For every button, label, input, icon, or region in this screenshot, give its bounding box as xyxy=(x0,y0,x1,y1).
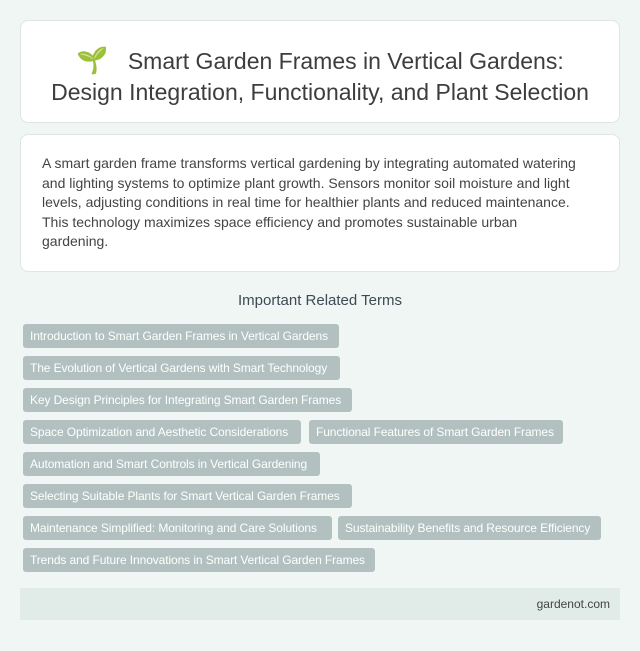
tag xyxy=(309,420,563,444)
tag xyxy=(23,324,339,348)
description card xyxy=(20,134,620,272)
tag: Space Optimization and Aesthetic Considerations xyxy=(30,425,288,439)
tag xyxy=(23,548,375,572)
title card xyxy=(20,20,620,123)
tag: Introduction to Smart Garden Frames in Vertical Gardens xyxy=(30,329,328,343)
tag: Selecting Suitable Plants for Smart Vertical Garden Frames xyxy=(30,489,340,503)
footer text: gardenot.com xyxy=(537,597,610,611)
tag: Functional Features of Smart Garden Frames xyxy=(316,425,554,439)
tag: Key Design Principles for Integrating Smart Garden Frames xyxy=(30,393,341,407)
section heading: Important Related Terms xyxy=(238,292,402,309)
tag: The Evolution of Vertical Gardens with Smart Technology xyxy=(30,361,327,375)
tag xyxy=(338,516,601,540)
tag xyxy=(23,516,332,540)
tag xyxy=(23,356,340,380)
footer xyxy=(20,588,620,620)
tag: Automation and Smart Controls in Vertical Gardening xyxy=(30,457,307,471)
title: Design Integration, Functionality, and Plant Selection xyxy=(51,79,589,105)
tag xyxy=(23,484,352,508)
tag: Sustainability Benefits and Resource Efficiency xyxy=(345,521,590,535)
description text: A smart garden frame transforms vertical gardening by integrating automated watering and lighting systems to optimize plant growth. Sensors monitor soil moisture and light levels, adjusting conditions in real time for healthier plants and reduced maintenance. This technology maximizes space efficiency and promotes sustainable urban gardening. xyxy=(42,155,576,249)
tag xyxy=(23,420,301,444)
tag: Maintenance Simplified: Monitoring and Care Solutions xyxy=(30,521,317,535)
tag xyxy=(23,388,352,412)
tag: Trends and Future Innovations in Smart Vertical Garden Frames xyxy=(30,553,365,567)
title xyxy=(51,45,589,105)
tag xyxy=(23,452,320,476)
title: 🌱 Smart Garden Frames in Vertical Gardens: xyxy=(76,45,564,75)
